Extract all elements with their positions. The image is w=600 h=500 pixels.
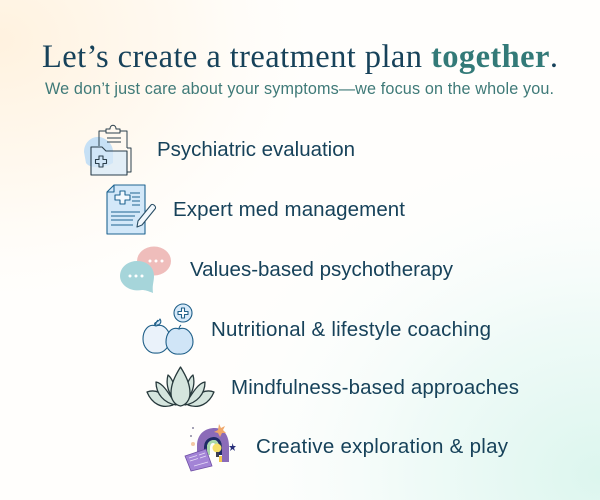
label: creative exploration & play: Creative exploration & play: [256, 435, 509, 458]
label: values-based psychotherapy: Values-based psychotherapy: [190, 258, 454, 281]
icon: clipboard and medical folder: [84, 125, 131, 175]
icon: rainbow, book and lightbulb: [185, 424, 236, 471]
subtitle: We don’t just care about your symptoms—we focus on the whole you.: [45, 80, 554, 98]
label: nutritional & lifestyle coaching: Nutritional & lifestyle coaching: [211, 318, 491, 341]
label: expert med management: Expert med management: [173, 198, 405, 221]
icon: medical document with pen: [107, 185, 156, 234]
label: psychiatric evaluation: Psychiatric evaluation: [157, 138, 355, 161]
icon: lotus flower: [147, 367, 214, 406]
label: mindfulness-based approaches: Mindfulness-based approaches: [231, 376, 519, 399]
icon: speech bubbles: [120, 246, 171, 293]
title: Let’s create a treatment plan together.: [42, 39, 558, 75]
icon: apples with plus badge: [143, 304, 193, 354]
